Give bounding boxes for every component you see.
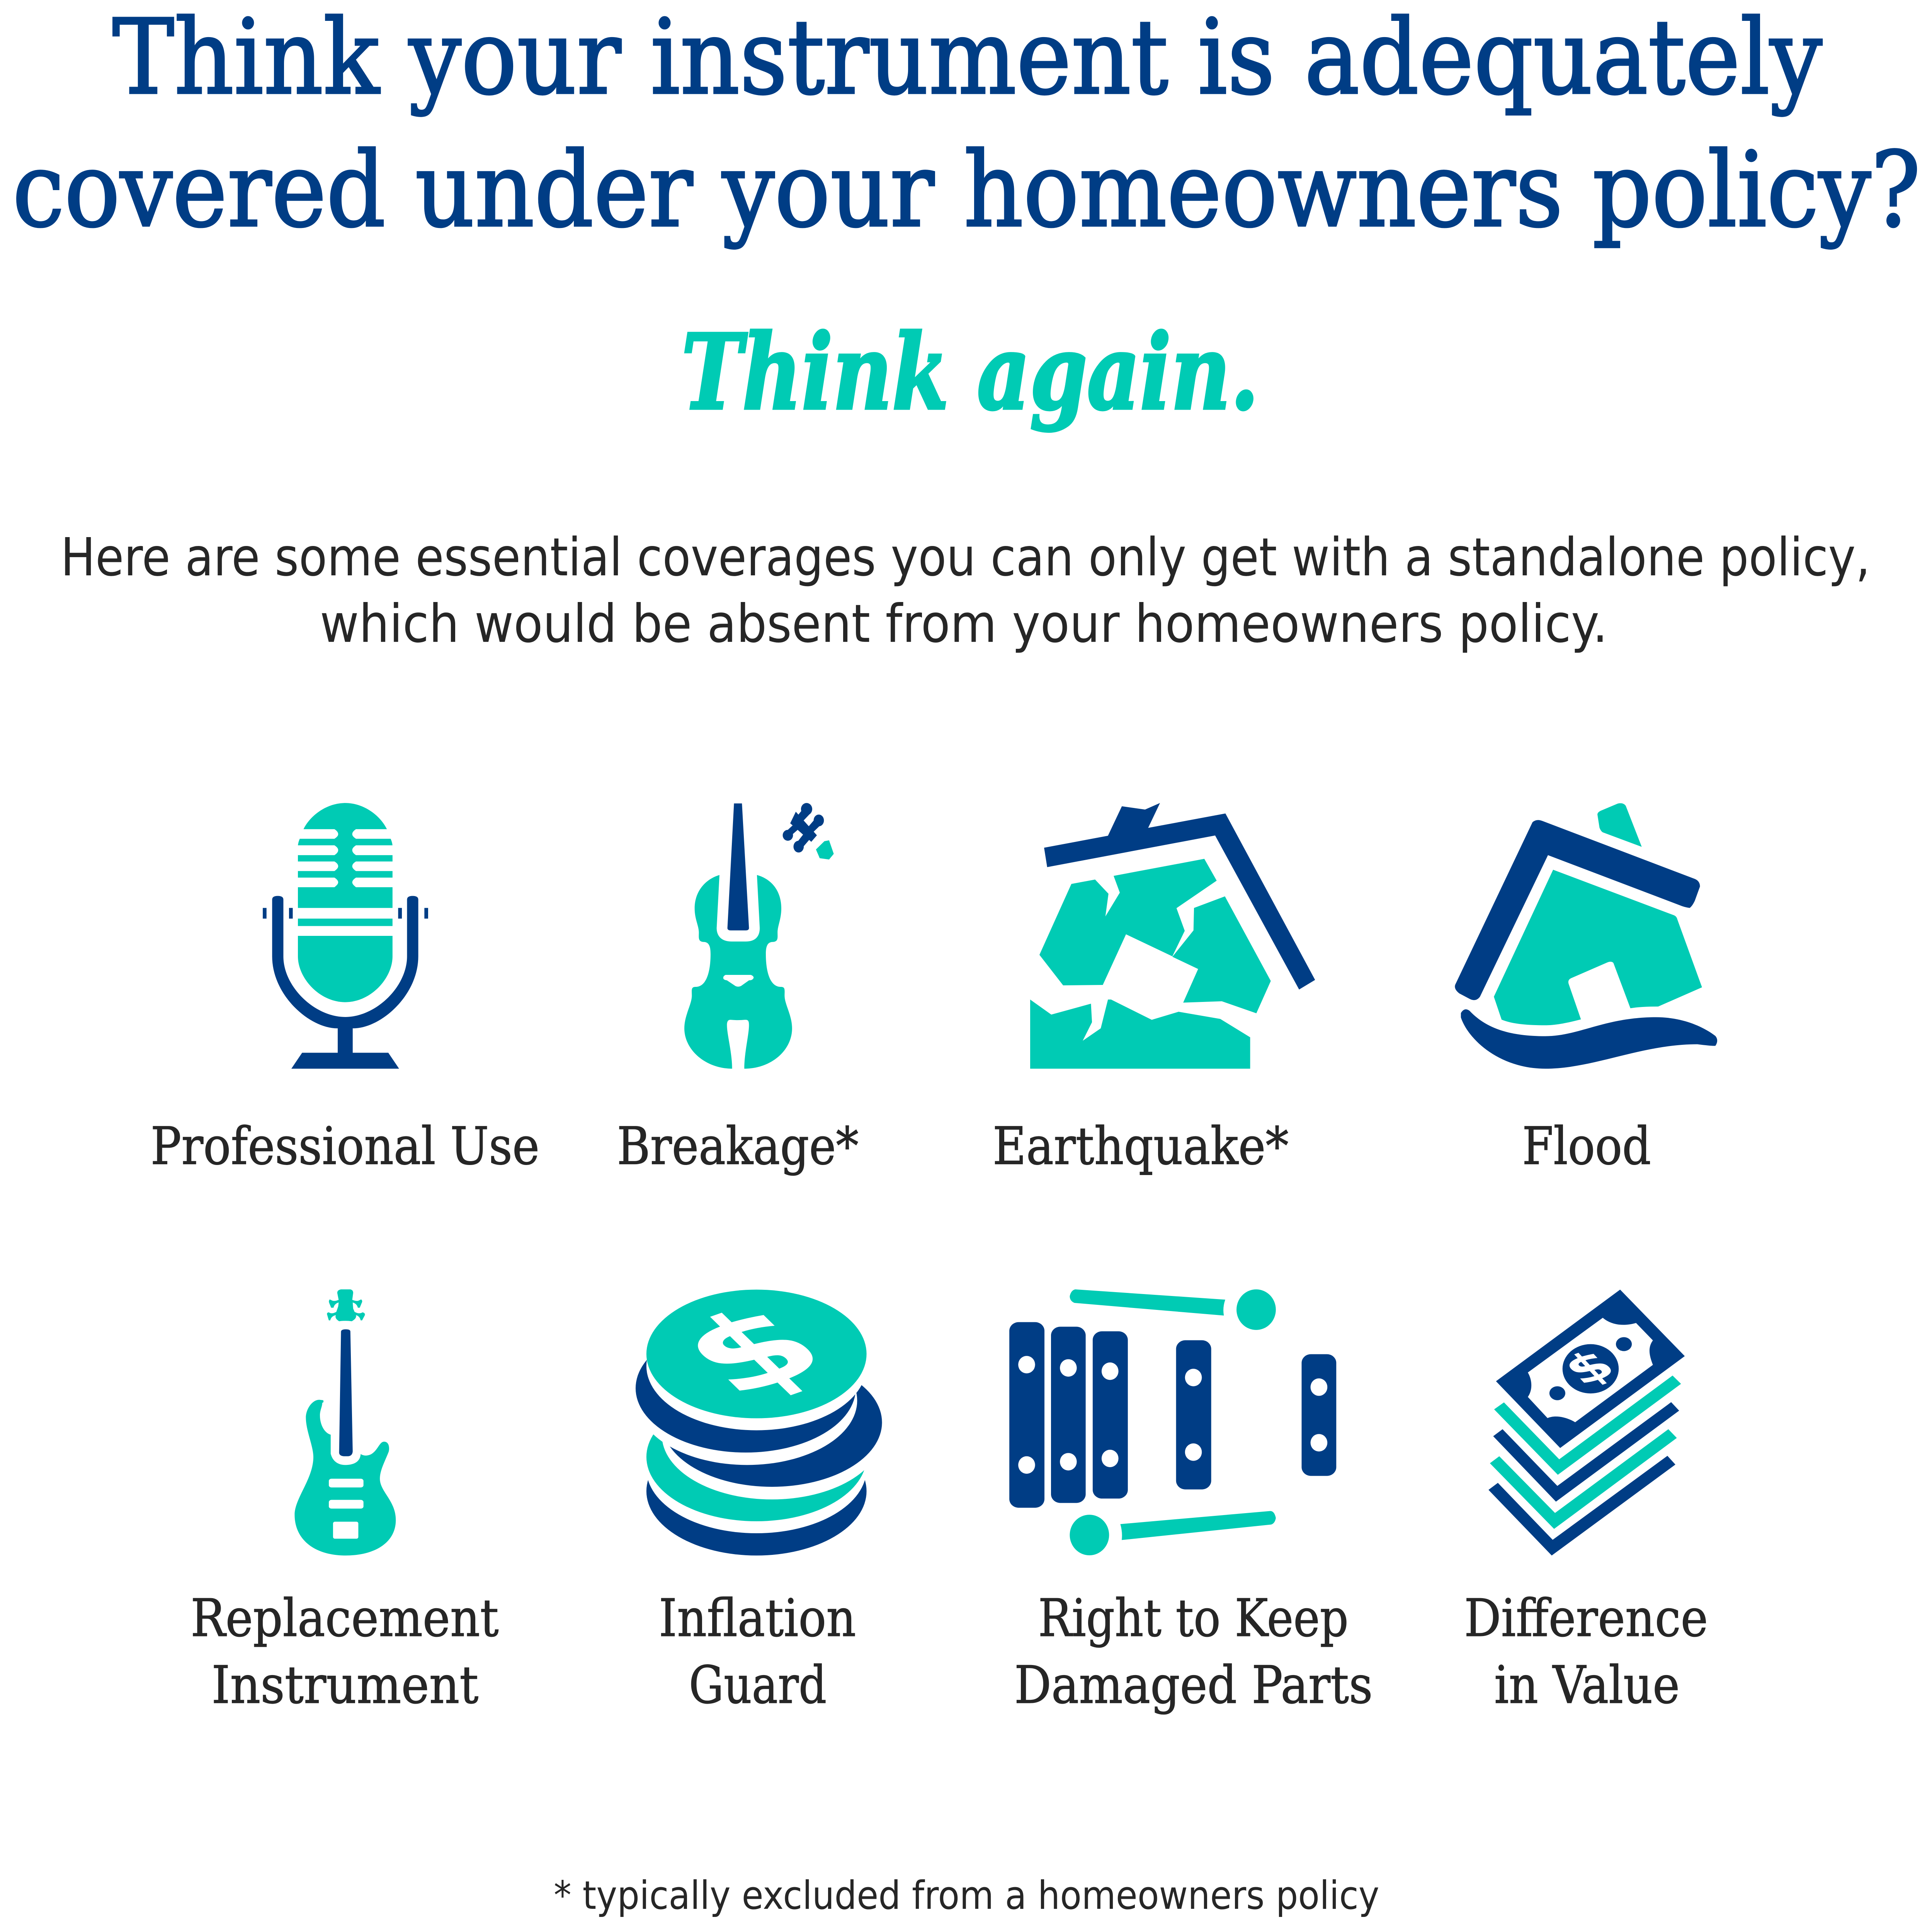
intro text block: which would be absent from your homeowners policy. [320,594,1608,655]
icon: coin stack [636,1282,882,1556]
label: Difference in Value [1464,1588,1708,1716]
icon: stack of money: $ [1552,1341,1626,1394]
icon: violin [684,803,834,1069]
label: Difference in Value: in Value [1494,1655,1680,1716]
icon: xylophone with mallets [1009,1289,1336,1555]
label: Earthquake: Earthquake* [993,1116,1289,1177]
label: Replacement Instrument: Instrument [211,1655,478,1716]
label: Inflation Guard: Guard [689,1655,827,1716]
label: Right to Keep Damaged Parts [1014,1588,1373,1716]
icon: flooded house [1455,803,1717,1069]
label: Inflation Guard: Inflation [659,1588,856,1648]
label: Right to Keep Damaged Parts: Damaged Parts [1014,1655,1373,1716]
icon: electric guitar [294,1289,396,1556]
label: Professional Use: Professional Use [151,1116,539,1177]
label: Breakage: Breakage* [617,1116,859,1177]
icon: stack of money [1488,1289,1685,1556]
label: Replacement Instrument: Replacement [190,1588,499,1648]
icon: earthquake damaged house [1030,803,1315,1069]
label: Right to Keep Damaged Parts: Right to Keep [1038,1588,1349,1648]
label: Inflation Guard [659,1588,856,1716]
footnote: * typically excluded from a homeowners policy [554,1873,1379,1918]
subtitle: Think again: Think again. [682,312,1259,433]
label: Flood: Flood [1522,1116,1651,1177]
intro text block [61,527,1870,655]
label: Replacement Instrument [190,1588,499,1716]
icon: coin stack: $ [650,1282,856,1419]
icon: microphone [263,803,428,1069]
title [12,0,1921,250]
label: Difference in Value: Difference [1464,1588,1708,1648]
